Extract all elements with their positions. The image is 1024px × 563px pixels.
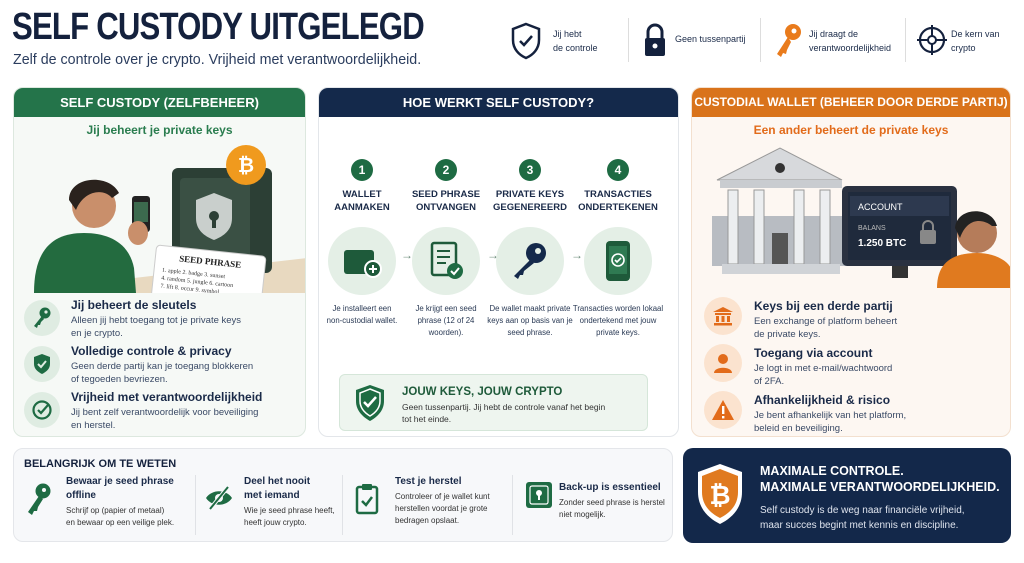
item: freedom: Jij bent zelf verantwoordelijk voor beveiliging xyxy=(71,407,258,418)
item: keys third party xyxy=(704,297,898,340)
panel header: HOE WERKT SELF CUSTODY? xyxy=(403,95,594,110)
illustration: person with safe: 4. random 5. jungle 6. cartoon xyxy=(161,276,233,289)
illustration: person with safe: ₿ xyxy=(238,155,254,177)
step 4 xyxy=(573,159,663,337)
step 3: PRIVATE KEYS xyxy=(496,189,564,200)
item: control & privacy: Volledige controle & privacy xyxy=(71,344,232,358)
step 4: TRANSACTIES xyxy=(584,189,652,200)
illustration: person with safe xyxy=(34,145,305,293)
tip: backup: Zonder seed phrase is herstel xyxy=(559,498,665,507)
header badges xyxy=(512,18,1000,62)
conclusion heading: MAXIMALE VERANTWOORDELIJKHEID. xyxy=(760,480,1000,494)
badge: no intermediary xyxy=(628,18,748,62)
panel header xyxy=(14,88,305,117)
step 2: phrase (12 of 24 xyxy=(418,316,474,325)
item: dependency risk: Afhankelijkheid & risico xyxy=(754,393,890,407)
illustration: person with safe: SEED PHRASE xyxy=(179,253,242,270)
step 1: Je installeert een xyxy=(333,304,391,313)
item: account access: Toegang via account xyxy=(754,346,872,360)
illustration: bank and monitor: BALANS xyxy=(858,225,886,232)
badge: control: Jij hebt xyxy=(553,29,582,39)
tip: never share xyxy=(195,475,345,535)
step 2: SEED PHRASE xyxy=(412,189,480,200)
step 2: ONTVANGEN xyxy=(416,202,476,213)
item: account access: Je logt in met e-mail/wachtwoord xyxy=(754,363,892,374)
item: dependency risk xyxy=(704,391,906,434)
panel header: CUSTODIAL WALLET (BEHEER DOOR DERDE PARTIJ) xyxy=(694,95,1008,109)
step 1: non-custodial wallet. xyxy=(327,316,397,325)
tip: backup: niet mogelijk. xyxy=(559,510,606,519)
tip: offline: en bewaar op een veilige plek. xyxy=(66,518,174,527)
panel: conclusion xyxy=(683,448,1011,543)
badge: responsibility: Jij draagt de xyxy=(809,29,858,39)
step 3: keys aan op basis van je xyxy=(487,316,573,325)
step 2: Je krijgt een seed xyxy=(415,304,477,313)
panel: how it works xyxy=(318,87,679,437)
conclusion text: Self custody is de weg naar financiële vrijheid, xyxy=(760,505,965,516)
step 4: private keys. xyxy=(596,328,640,337)
badge: responsibility xyxy=(760,18,895,62)
badge: responsibility: verantwoordelijkheid xyxy=(809,43,891,53)
item: freedom xyxy=(24,390,262,431)
step 3: 3 xyxy=(527,163,533,177)
step 3: seed phrase. xyxy=(507,328,553,337)
tip: test recovery: Controleer of je wallet kunt xyxy=(395,492,490,501)
item: keys third party: Keys bij een derde partij xyxy=(754,299,893,313)
callout: your keys: tot het einde. xyxy=(402,414,451,424)
title: SELF CUSTODY UITGELEGD xyxy=(12,6,424,48)
step 1: WALLET xyxy=(342,189,382,200)
panel: important to know xyxy=(13,448,673,542)
icon: bitcoin shield: ₿ xyxy=(709,480,731,510)
item: keys third party: de private keys. xyxy=(754,329,821,340)
item: account access: of 2FA. xyxy=(754,376,784,387)
step 4: Transacties worden lokaal xyxy=(573,304,663,313)
item: dependency risk: beleid en beveiliging. xyxy=(754,423,843,434)
subtitle: Zelf de controle over je crypto. Vrijheid met verantwoordelijkheid. xyxy=(13,51,421,68)
tip: test recovery: Test je herstel xyxy=(395,476,462,487)
arrow: → xyxy=(571,248,583,262)
step 1: 1 xyxy=(359,163,365,177)
arrow: → xyxy=(487,248,499,262)
tip: offline: offline xyxy=(66,490,96,501)
badge: core: crypto xyxy=(951,43,976,53)
item: keys: Jij beheert de sleutels xyxy=(71,298,196,312)
illustration: person with safe: 1. apple 2. badge 3. sunset xyxy=(162,268,226,280)
item: keys: Alleen jij hebt toegang tot je private keys xyxy=(71,315,241,326)
illustration: bank and monitor: 1.250 BTC xyxy=(858,238,906,249)
callout: your keys: JOUW KEYS, JOUW CRYPTO xyxy=(402,386,562,398)
panel subheading: Jij beheert je private keys xyxy=(86,123,233,137)
step 3: GEGENEREERD xyxy=(493,202,567,213)
badge: control: de controle xyxy=(553,43,598,53)
item: dependency risk: Je bent afhankelijk van het platform, xyxy=(754,410,906,421)
step 1: AANMAKEN xyxy=(334,202,390,213)
conclusion heading: MAXIMALE CONTROLE. xyxy=(760,464,904,478)
illustration: bank and monitor xyxy=(712,148,1010,288)
step 1 xyxy=(327,159,397,325)
panel header xyxy=(319,88,678,117)
callout: your keys xyxy=(339,374,648,431)
tip: never share: met iemand xyxy=(244,490,300,501)
section heading: BELANGRIJK OM TE WETEN xyxy=(24,458,176,470)
tip: test recovery: bedragen opslaat. xyxy=(395,516,459,525)
step 4: ondertekend met jouw xyxy=(580,316,656,325)
step 2: 2 xyxy=(443,163,449,177)
tip: never share: Wie je seed phrase heeft, xyxy=(244,506,335,515)
tip: backup: Back-up is essentieel xyxy=(559,482,661,493)
panel subheading: Een ander beheert de private keys xyxy=(754,123,948,137)
conclusion heading xyxy=(760,464,1000,494)
icon: bitcoin shield xyxy=(698,464,742,524)
item: control & privacy: Geen derde partij kan je toegang blokkeren xyxy=(71,361,253,372)
tip: test recovery: herstellen voordat je grote xyxy=(395,504,488,513)
arrow: → xyxy=(401,248,413,262)
step 3 xyxy=(487,159,573,337)
panel: custodial wallet xyxy=(691,87,1011,437)
badge: no intermediary: Geen tussenpartij xyxy=(675,34,746,44)
callout: your keys: Geen tussenpartij. Jij hebt de controle vanaf het begin xyxy=(402,402,605,412)
item: keys: en je crypto. xyxy=(71,328,123,339)
tip: offline: Schrijf op (papier of metaal) xyxy=(66,506,164,515)
badge: core: De kern van xyxy=(951,29,1000,39)
item: control & privacy xyxy=(24,344,253,385)
item: freedom: Vrijheid met verantwoordelijkheid xyxy=(71,390,262,404)
tip: backup xyxy=(512,475,672,535)
panel: self custody xyxy=(13,87,306,437)
tip: test recovery xyxy=(342,475,512,535)
conclusion text xyxy=(760,505,965,531)
item: control & privacy: of tegoeden bevriezen. xyxy=(71,374,168,385)
badge: core xyxy=(905,18,1015,62)
illustration: bank and monitor: ACCOUNT xyxy=(858,202,903,212)
item: keys third party: Een exchange of platform beheert xyxy=(754,316,897,327)
tip: offline xyxy=(28,476,174,527)
step 4: ONDERTEKENEN xyxy=(578,202,658,213)
item: account access xyxy=(704,344,892,387)
step 2 xyxy=(412,159,480,337)
item: keys xyxy=(24,298,241,339)
step 3: De wallet maakt private xyxy=(489,304,571,313)
panel header xyxy=(692,88,1010,117)
tip: never share: Deel het nooit xyxy=(244,476,310,487)
badge: control xyxy=(512,22,598,60)
conclusion text: maar succes begint met kennis en discipline. xyxy=(760,520,958,531)
panel header: SELF CUSTODY (ZELFBEHEER) xyxy=(60,95,259,110)
tip: offline: Bewaar je seed phrase xyxy=(66,476,174,487)
step 2: woorden). xyxy=(429,328,463,337)
step 4: 4 xyxy=(615,163,621,177)
item: freedom: en herstel. xyxy=(71,420,115,431)
tip: never share: heeft jouw crypto. xyxy=(244,518,307,527)
